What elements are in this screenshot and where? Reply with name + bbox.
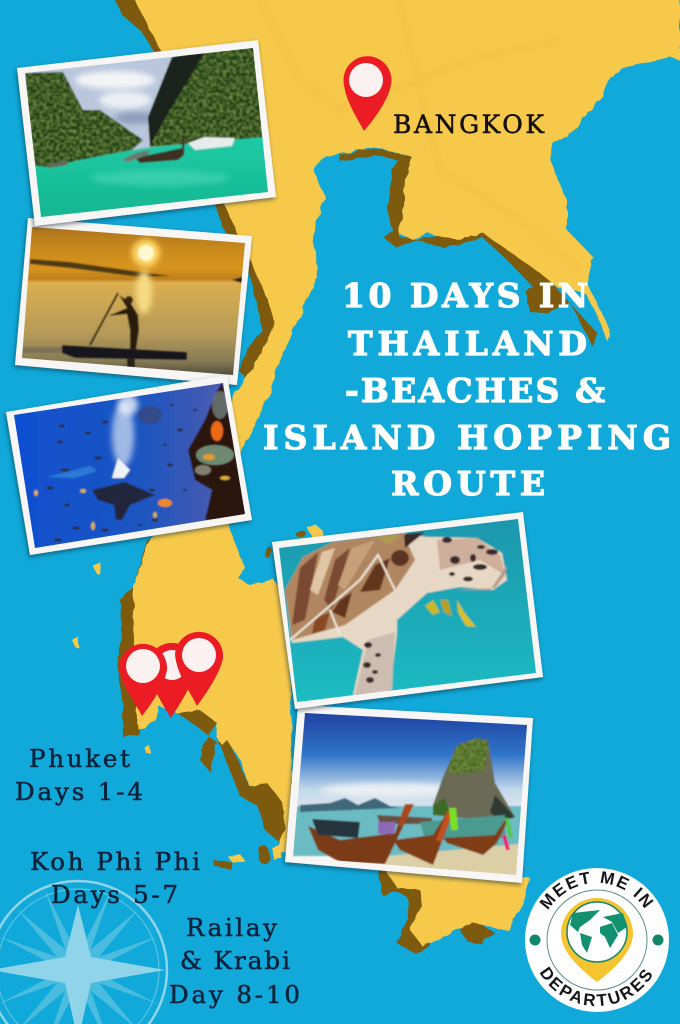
itinerary: Railay and Krabi: & Krabi — [180, 946, 290, 975]
logo: Meet Me In Departures: DEPARTURES — [540, 966, 652, 1006]
photo: scuba diver on reef — [5, 375, 255, 555]
paper creases — [260, 0, 580, 270]
photo frame — [15, 218, 252, 385]
itinerary: Phuket: Days 1-4 — [15, 777, 143, 806]
itinerary: Railay and Krabi: Day 8-10 — [169, 980, 300, 1009]
title — [263, 276, 671, 503]
pin: Bangkok — [343, 56, 391, 131]
title: 10 DAYS IN — [342, 276, 588, 315]
photo: Phi Phi lagoon with longtail boat — [17, 40, 276, 226]
coast shadow — [113, 0, 597, 955]
photo: sea turtle with yellow fish — [270, 512, 545, 709]
itinerary: Koh Phi Phi — [30, 847, 200, 909]
logo: Meet Me In Departures: MEET ME IN — [539, 871, 654, 910]
title: ISLAND HOPPING — [263, 418, 671, 457]
itinerary: Phuket: Phuket — [29, 744, 130, 773]
photo frame — [285, 705, 533, 883]
itinerary: Railay and Krabi — [169, 913, 300, 1009]
photo scene — [285, 710, 530, 880]
title: ROUTE — [391, 464, 545, 503]
photo scene — [14, 383, 245, 548]
itinerary: Koh Phi Phi: Koh Phi Phi — [30, 847, 200, 876]
logo: Meet Me In Departures — [525, 868, 669, 1012]
pin: Koh Phi Phi — [148, 643, 196, 718]
logo world map — [570, 910, 627, 953]
pin: Railay and Krabi — [175, 632, 223, 706]
photo frame — [6, 375, 252, 555]
title: -BEACHES & — [345, 371, 605, 410]
photo: paddleboarder at sunset — [0, 218, 255, 385]
photo scene — [22, 227, 245, 375]
photo scene — [270, 515, 545, 705]
label: Bangkok: BANGKOK — [393, 110, 545, 139]
title: THAILAND — [348, 324, 587, 363]
itinerary: Koh Phi Phi: Days 5-7 — [51, 880, 178, 909]
compass rose — [0, 881, 167, 1024]
photo frame — [17, 40, 276, 226]
logo pin — [561, 898, 633, 982]
photo: Railay longtail boats and limestone rock — [285, 705, 533, 883]
itinerary: Phuket — [15, 744, 143, 806]
photo frame — [272, 512, 543, 709]
itinerary: Railay and Krabi: Railay — [186, 913, 277, 942]
pin: Phuket — [119, 644, 167, 716]
photo scene — [20, 45, 275, 220]
